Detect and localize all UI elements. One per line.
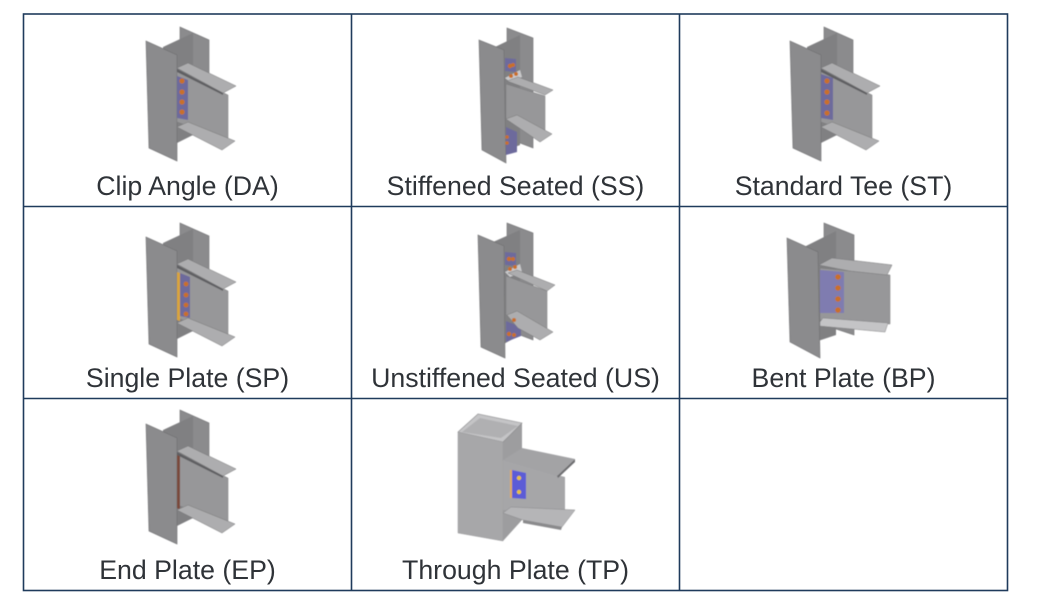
- label: Bent Plate (BP): [752, 363, 935, 393]
- diagram: unstiffened seated connection: [478, 223, 555, 358]
- cell: Unstiffened Seated (US): [371, 223, 660, 393]
- cell: End Plate (EP): [99, 410, 276, 585]
- label: End Plate (EP): [99, 555, 276, 585]
- diagram: stiffened seated connection: [479, 28, 553, 163]
- diagram: end plate connection: [146, 410, 236, 544]
- label: Stiffened Seated (SS): [387, 171, 644, 201]
- cell: Bent Plate (BP): [752, 223, 935, 393]
- diagram: through plate connection with tube column: [458, 414, 575, 541]
- cell: Stiffened Seated (SS): [387, 28, 644, 201]
- cell: Clip Angle (DA): [96, 27, 279, 201]
- label: Single Plate (SP): [86, 363, 289, 393]
- cell: Through Plate (TP): [402, 414, 629, 585]
- diagram: bent plate connection: [787, 223, 892, 358]
- cell: Standard Tee (ST): [735, 27, 952, 201]
- label: Unstiffened Seated (US): [371, 363, 660, 393]
- label: Standard Tee (ST): [735, 171, 952, 201]
- diagram: standard tee connection: [790, 27, 880, 161]
- label: Through Plate (TP): [402, 555, 629, 585]
- diagram: single plate connection: [146, 223, 236, 357]
- diagram: clip angle connection: [146, 27, 236, 161]
- cell: Single Plate (SP): [86, 223, 289, 393]
- label: Clip Angle (DA): [96, 171, 279, 201]
